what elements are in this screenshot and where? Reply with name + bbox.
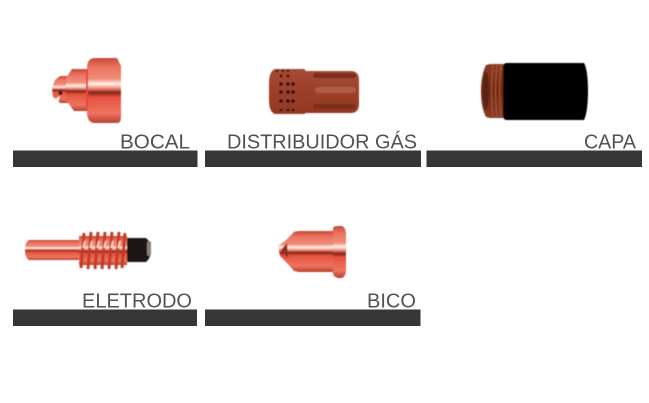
bar: eletrodo	[13, 310, 197, 326]
icon: capa part	[481, 63, 588, 120]
panel: eletrodo	[13, 232, 197, 326]
bar: bico	[205, 310, 420, 326]
panel: bico	[205, 226, 420, 326]
label: bico: BICO	[367, 290, 416, 312]
panel: distribuidor gas	[205, 69, 421, 167]
label: capa: CAPA	[584, 132, 637, 154]
panel: bocal	[13, 58, 198, 167]
icon: eletrodo part	[25, 232, 151, 269]
label: bocal: BOCAL	[120, 132, 190, 154]
label: eletrodo: ELETRODO	[82, 290, 192, 312]
bar: bocal	[13, 150, 198, 167]
icon: bico part	[278, 226, 346, 278]
icon: bocal part	[52, 58, 121, 123]
panel: capa	[426, 63, 642, 167]
icon: gas distributor part	[269, 69, 359, 114]
bar: distribuidor gas	[205, 150, 421, 167]
label: distribuidor gas: DISTRIBUIDOR GÁS	[227, 130, 417, 154]
bar: capa	[426, 150, 642, 167]
